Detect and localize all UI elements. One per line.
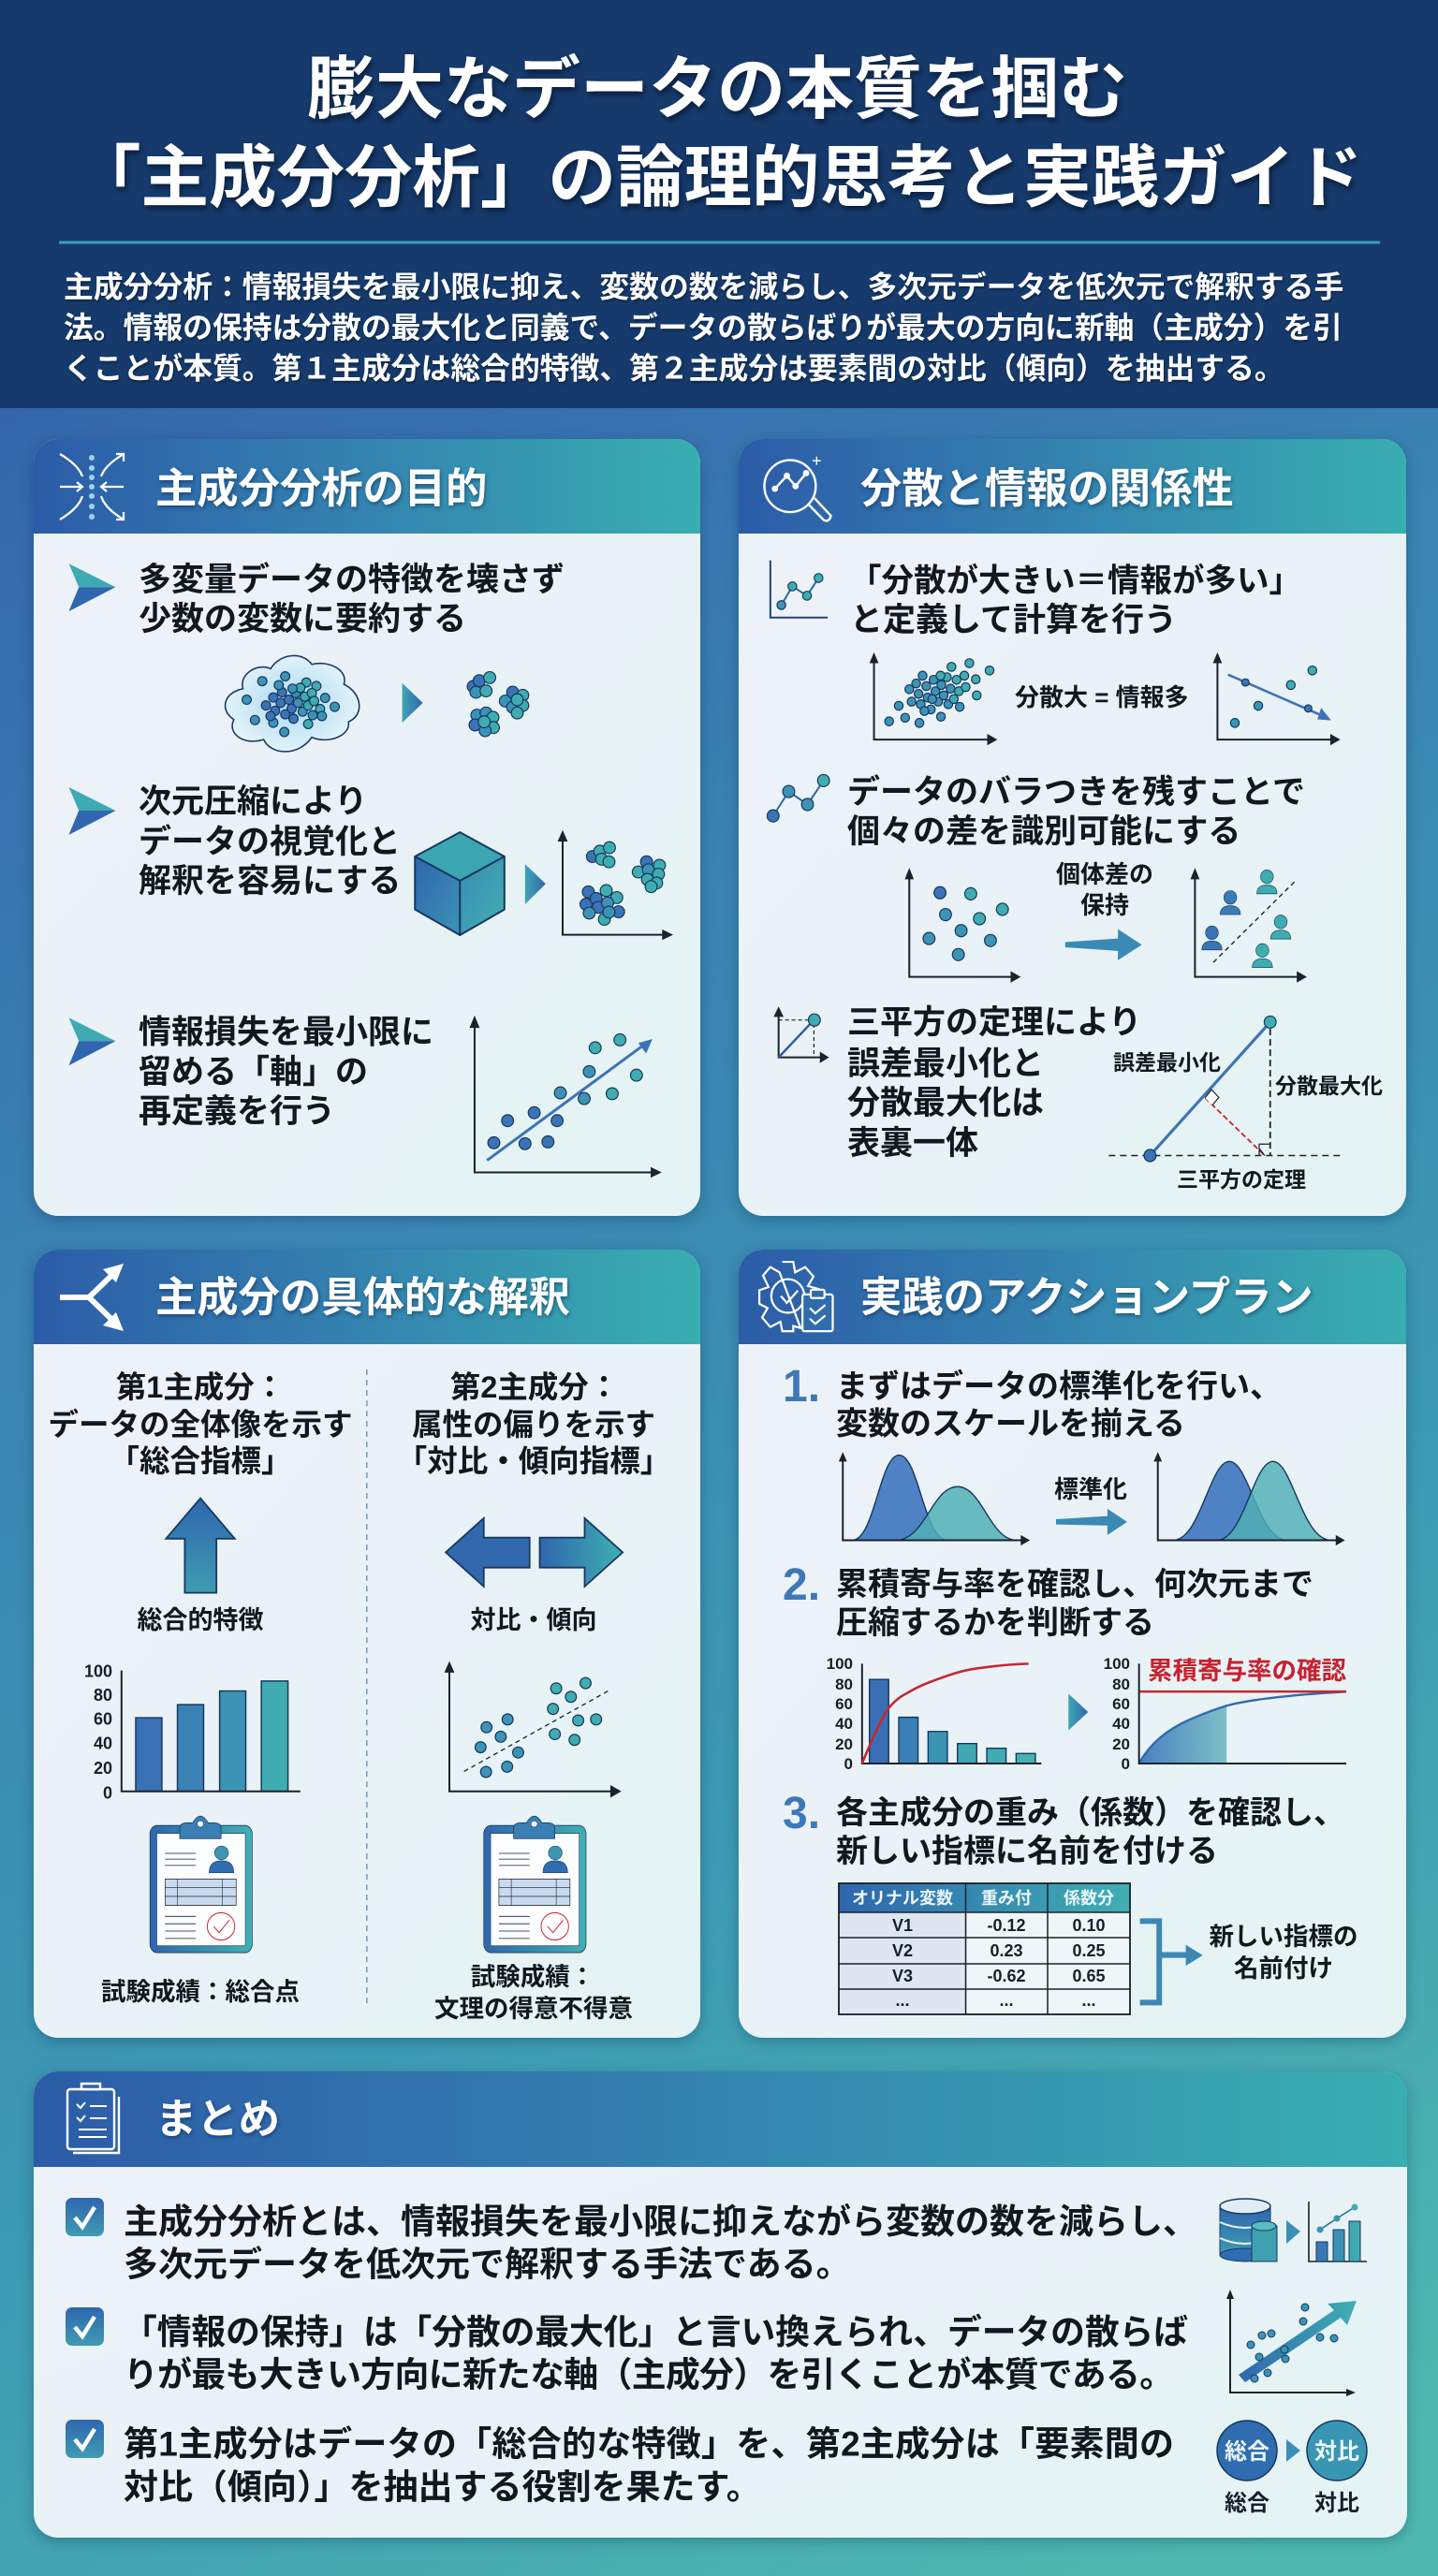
第1主成分 heading: データの全体像を示す [48, 1407, 353, 1442]
right chart axis numbers: 20 [1112, 1735, 1130, 1753]
step 1 text: まずはデータの標準化を行い、 [836, 1368, 1282, 1404]
item 1 text: 「分散が大きい＝情報が多い」 [849, 563, 1301, 599]
table: オリナル変数 [852, 1889, 953, 1908]
第2主成分 heading [397, 1370, 670, 1478]
bar chart axis numbers [84, 1662, 112, 1803]
chart: scatter with axis [470, 1016, 662, 1178]
intro text: くことが本質。第１主成分は総合的特徴、第２主成分は要素間の対比（傾向）を抽出する。 [64, 352, 1284, 386]
icon: clipboard left [150, 1816, 252, 1953]
panel 1 graphics [68, 564, 673, 1178]
summary text 2: 「情報の保持」は「分散の最大化」と言い換えられ、データの散らば [123, 2313, 1188, 2351]
chart: scatter with trend [445, 1661, 622, 1797]
panel: まとめ [34, 2071, 1407, 2538]
arrow [525, 864, 546, 904]
panel: 実践のアクションプラン [739, 1250, 1406, 2038]
label: 分散大=情報多: 分散大 = 情報多 [1015, 683, 1189, 711]
intro text [64, 270, 1343, 386]
bar chart axis numbers: 100 [84, 1662, 112, 1681]
icon: 総合 to 対比: 対比 [1314, 2491, 1359, 2516]
item 3 text: 留める「軸」の [139, 1054, 368, 1090]
step 3 text [836, 1795, 1345, 1869]
table: ... [1081, 1991, 1096, 2010]
item 3 text: 誤差最小化と [847, 1046, 1044, 1082]
summary text 1 [124, 2203, 1197, 2284]
triangle labels: 三平方の定理 [1177, 1167, 1306, 1192]
第1主成分 heading [48, 1370, 353, 1478]
right chart axis numbers: 80 [1112, 1676, 1130, 1693]
step numbers [783, 1362, 820, 1838]
icon: splitting arrows [60, 1264, 124, 1331]
icon: 総合 to 対比: 対比 [1314, 2439, 1359, 2465]
table: ... [895, 1991, 910, 2010]
summary text 2 [123, 2313, 1188, 2394]
item 2 text: データのバラつきを残すことで [847, 773, 1305, 811]
bar chart axis numbers: 0 [103, 1784, 112, 1803]
item 2 text: 次元圧縮により [139, 783, 367, 820]
panel 3 graphics [122, 1369, 623, 2005]
left chart axis numbers: 80 [835, 1676, 853, 1693]
item 2 text: データの視覚化と [139, 823, 401, 860]
panel: 主成分分析の目的 [34, 439, 700, 1216]
step numbers: 3. [783, 1789, 820, 1838]
table [839, 1883, 1130, 2014]
table: V1 [892, 1916, 913, 1935]
intro text: 法。情報の保持は分散の最大化と同義で、データの散らばりが最大の方向に新軸（主成分）を引 [64, 311, 1343, 344]
icon: bullet arrows [68, 564, 115, 1065]
icon: principal axis scatter [1226, 2290, 1357, 2396]
bar chart axis numbers: 20 [94, 1759, 112, 1778]
item 3 text: 分散最大化は [847, 1085, 1044, 1121]
第1主成分 heading: 「総合指標」 [109, 1444, 292, 1478]
第1主成分 heading: 第1主成分： [116, 1370, 285, 1404]
step 3 text: 各主成分の重み（係数）を確認し、 [836, 1795, 1345, 1831]
checkboxes [66, 2198, 104, 2458]
table: 重み付 [981, 1889, 1032, 1908]
diagram: pythagoras [1108, 1016, 1342, 1162]
item 2 text: 個々の差を識別可能にする [847, 813, 1240, 850]
bar chart axis numbers: 60 [94, 1709, 112, 1728]
caption: 文理の得意不得意: 文理の得意不得意 [434, 1995, 633, 2023]
triangle labels: 分散最大化 [1275, 1074, 1383, 1098]
summary text 1: 主成分分析とは、情報損失を最小限に抑えながら変数の数を減らし、 [124, 2203, 1197, 2241]
summary text 1: 多次元データを低次元で解釈する手法である。 [124, 2245, 851, 2284]
left chart axis numbers: 40 [835, 1715, 853, 1733]
table bracket and arrow [1140, 1921, 1203, 2002]
caption: 文理の得意不得意: 試験成績： [471, 1963, 594, 1991]
item 2 text [139, 783, 401, 900]
icon: 総合 to 対比: 総合 [1225, 2439, 1269, 2465]
icon: data cloud [226, 655, 360, 752]
icon: network line [767, 774, 829, 822]
第2主成分 heading: 「対比・傾向指標」 [397, 1444, 670, 1478]
title: 「主成分分析」の論理的思考と実践ガイド [73, 140, 1363, 216]
left chart axis numbers [827, 1655, 853, 1773]
right chart axis numbers: 100 [1104, 1655, 1130, 1673]
chart: cumulative curve [1139, 1663, 1346, 1764]
item 3 text [139, 1015, 433, 1130]
item 1 text: 少数の変数に要約する [139, 601, 466, 637]
left chart axis numbers: 60 [835, 1695, 853, 1713]
label: 個体差の保持: 個体差の [1056, 860, 1153, 888]
arrow [403, 683, 423, 723]
table: 係数分 [1064, 1889, 1114, 1908]
arrow [1056, 1509, 1127, 1535]
panel 4 graphics [759, 1262, 1346, 2002]
triangle labels [1113, 1050, 1383, 1192]
arrow [1068, 1693, 1088, 1731]
label: 個体差の保持 [1056, 860, 1153, 919]
icon: pythagoras small [773, 1006, 829, 1063]
caption: 対比・傾向: 対比・傾向 [470, 1606, 597, 1634]
heading: まとめ [155, 2097, 280, 2143]
panel 2 graphics [764, 457, 1342, 1162]
item 1 text [849, 563, 1301, 638]
summary text 3 [124, 2424, 1174, 2507]
step numbers: 1. [783, 1362, 820, 1412]
summary text 3: 対比（傾向）」を抽出する役割を果たす。 [124, 2467, 761, 2507]
table: 0.25 [1072, 1941, 1106, 1960]
chart: people scatter [1191, 868, 1307, 983]
icon: line chart [770, 561, 828, 618]
table: 0.65 [1072, 1967, 1106, 1985]
label: 新しい指標の名前付け [1210, 1923, 1357, 1983]
chart: clusters on axes [558, 830, 673, 940]
第2主成分 heading: 第2主成分： [450, 1370, 619, 1404]
label: 標準化: 標準化 [1054, 1475, 1127, 1503]
icon: compression [60, 454, 124, 520]
item 3 text: 再定義を行う [139, 1093, 335, 1130]
step numbers: 2. [783, 1560, 820, 1610]
label: 新しい指標の名前付け: 名前付け [1234, 1954, 1333, 1983]
item 3 text: 三平方の定理により [847, 1004, 1141, 1041]
icon: up arrow [166, 1499, 235, 1593]
icon: clusters [467, 672, 529, 737]
heading: 主成分の具体的な解釈 [155, 1275, 570, 1321]
icon: database to chart [1220, 2199, 1367, 2261]
table: V2 [892, 1941, 913, 1960]
step 1 text [836, 1368, 1282, 1442]
table: 0.23 [990, 1941, 1023, 1960]
left chart axis numbers: 0 [844, 1755, 853, 1773]
icon: cube [415, 832, 505, 935]
item 1 text: と定義して計算を行う [850, 602, 1177, 638]
label: 累積寄与率の確認: 累積寄与率の確認 [1148, 1657, 1346, 1685]
icon: checklist clipboard [67, 2084, 119, 2153]
table: -0.12 [987, 1916, 1026, 1935]
right chart axis numbers: 40 [1112, 1715, 1130, 1733]
item 3 text [847, 1004, 1141, 1162]
step 2 text [836, 1567, 1313, 1641]
icon: magnifier [764, 457, 831, 520]
bar chart axis numbers: 40 [94, 1734, 112, 1752]
label: 新しい指標の名前付け: 新しい指標の [1210, 1923, 1357, 1951]
heading: 実践のアクションプラン [860, 1275, 1313, 1321]
table: ... [999, 1991, 1014, 2010]
item 1 text: 多変量データの特徴を壊さず [139, 561, 565, 598]
right chart axis numbers: 60 [1112, 1695, 1130, 1713]
caption: 文理の得意不得意 [434, 1963, 633, 2023]
item 2 text [847, 773, 1305, 850]
chart: scree plot [862, 1663, 1041, 1764]
title: 膨大なデータの本質を掴む [307, 51, 1127, 127]
icon: gear and clipboard [759, 1262, 832, 1331]
step 2 text: 累積寄与率を確認し、何次元まで [836, 1567, 1313, 1603]
step 1 text: 変数のスケールを揃える [836, 1406, 1185, 1442]
chart: distribution before [839, 1452, 1030, 1545]
heading: 分散と情報の関係性 [860, 466, 1234, 512]
chart: distribution after [1153, 1452, 1345, 1545]
icon: 総合 to 対比 [1217, 2421, 1367, 2516]
intro text: 主成分分析：情報損失を最小限に抑え、変数の数を減らし、多次元データを低次元で解釈する手 [64, 270, 1343, 303]
item 1 text [139, 561, 565, 637]
left chart axis numbers: 100 [827, 1655, 853, 1673]
chart: large variance scatter [870, 652, 997, 745]
icon: clipboard right [484, 1816, 586, 1953]
table: -0.62 [987, 1967, 1026, 1985]
icon: 総合 to 対比: 総合 [1225, 2491, 1269, 2516]
panel: 分散と情報の関係性 [739, 439, 1406, 1216]
step 3 text: 新しい指標に名前を付ける [836, 1834, 1218, 1869]
step 2 text: 圧縮するかを判断する [836, 1605, 1154, 1641]
item 3 text: 情報損失を最小限に [139, 1015, 433, 1050]
caption: 総合的特徴: 総合的特徴 [137, 1606, 264, 1634]
left chart axis numbers: 20 [835, 1735, 853, 1753]
panel: 主成分の具体的な解釈 [34, 1250, 700, 2038]
table: V3 [892, 1967, 913, 1985]
chart: bar chart [122, 1671, 301, 1792]
title [73, 51, 1363, 216]
chart: individual difference scatter [904, 868, 1020, 983]
chart: regression scatter [1213, 652, 1341, 745]
label: 個体差の保持: 保持 [1080, 891, 1129, 919]
header band [0, 0, 1438, 408]
第2主成分 heading: 属性の偏りを示す [412, 1408, 655, 1442]
item 2 text: 解釈を容易にする [139, 863, 401, 900]
summary text 2: りが最も大きい方向に新たな軸（主成分）を引くことが本質である。 [124, 2355, 1174, 2394]
arrow [1065, 929, 1142, 960]
table: 0.10 [1072, 1916, 1106, 1935]
right chart axis numbers [1104, 1655, 1130, 1773]
right chart axis numbers: 0 [1122, 1755, 1130, 1773]
triangle labels: 誤差最小化 [1113, 1050, 1221, 1075]
heading: 主成分分析の目的 [155, 466, 487, 512]
caption: 総合点: 試験成績：総合点 [101, 1978, 300, 2006]
bar chart axis numbers: 80 [94, 1686, 112, 1705]
item 3 text: 表裏一体 [847, 1125, 978, 1162]
summary text 3: 第1主成分はデータの「総合的な特徴」を、第2主成分は「要素間の [124, 2424, 1174, 2464]
icon: opposing arrows [446, 1518, 623, 1587]
